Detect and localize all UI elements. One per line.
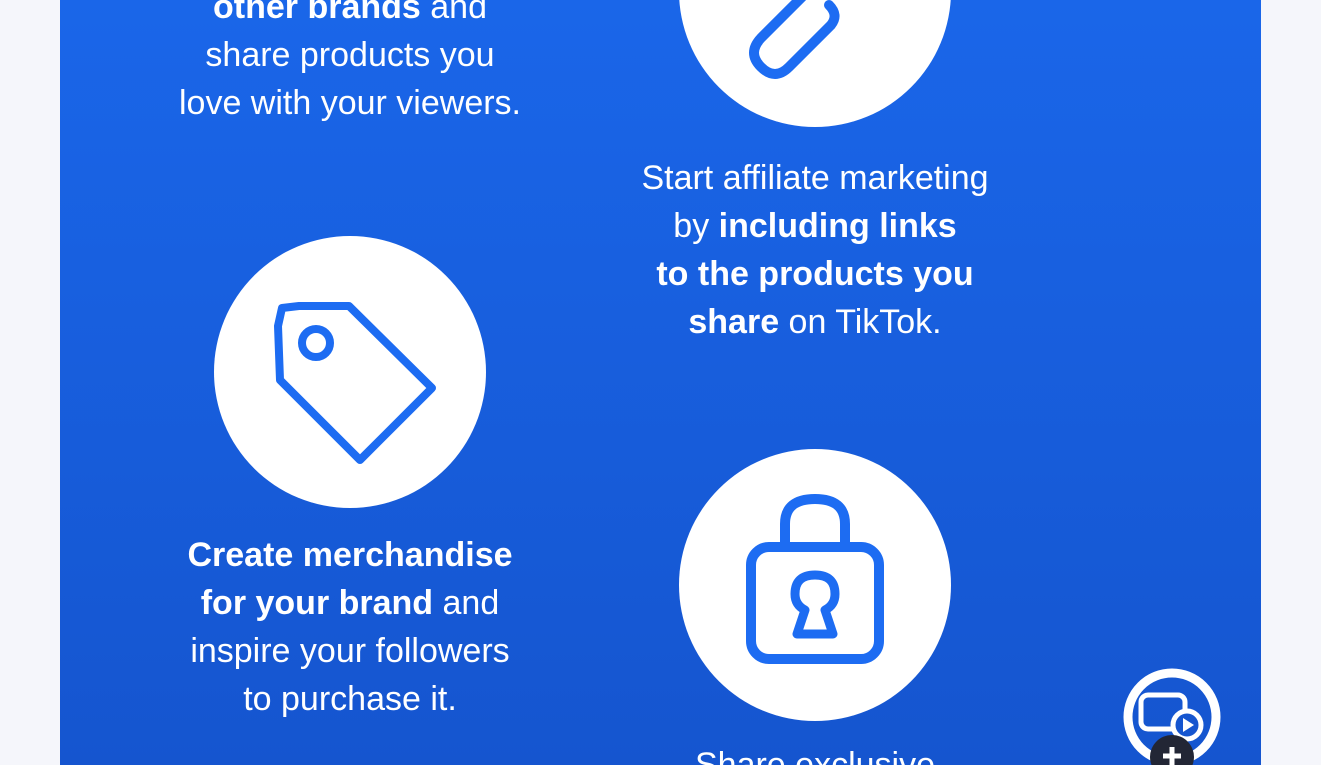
text block: affiliate marketing: Start affiliate marketing	[641, 159, 989, 197]
text block: affiliate marketing: by including links	[673, 207, 957, 245]
text block: affiliate marketing: to the products you	[656, 255, 974, 293]
icon: padlock	[746, 494, 884, 664]
text block: affiliate marketing	[641, 159, 989, 341]
icon circle: lock	[679, 449, 951, 721]
text block: top-left	[179, 0, 521, 122]
icon: video add button	[1124, 668, 1220, 765]
text block: top-left: share products you	[205, 36, 495, 74]
text block: merchandise: inspire your followers	[190, 632, 510, 670]
icon: link	[749, 0, 840, 79]
icon: price tag	[274, 302, 436, 464]
icon circle: tag	[214, 236, 486, 508]
text block: merchandise: Create merchandise	[187, 536, 513, 574]
text block: top-left: love with your viewers.	[179, 84, 521, 122]
text block: merchandise: to purchase it.	[243, 680, 457, 718]
text block: affiliate marketing: share on TikTok.	[688, 303, 942, 341]
text block: merchandise: for your brand and	[201, 584, 499, 622]
text block: merchandise	[187, 536, 513, 718]
icon circle: link	[679, 0, 951, 127]
